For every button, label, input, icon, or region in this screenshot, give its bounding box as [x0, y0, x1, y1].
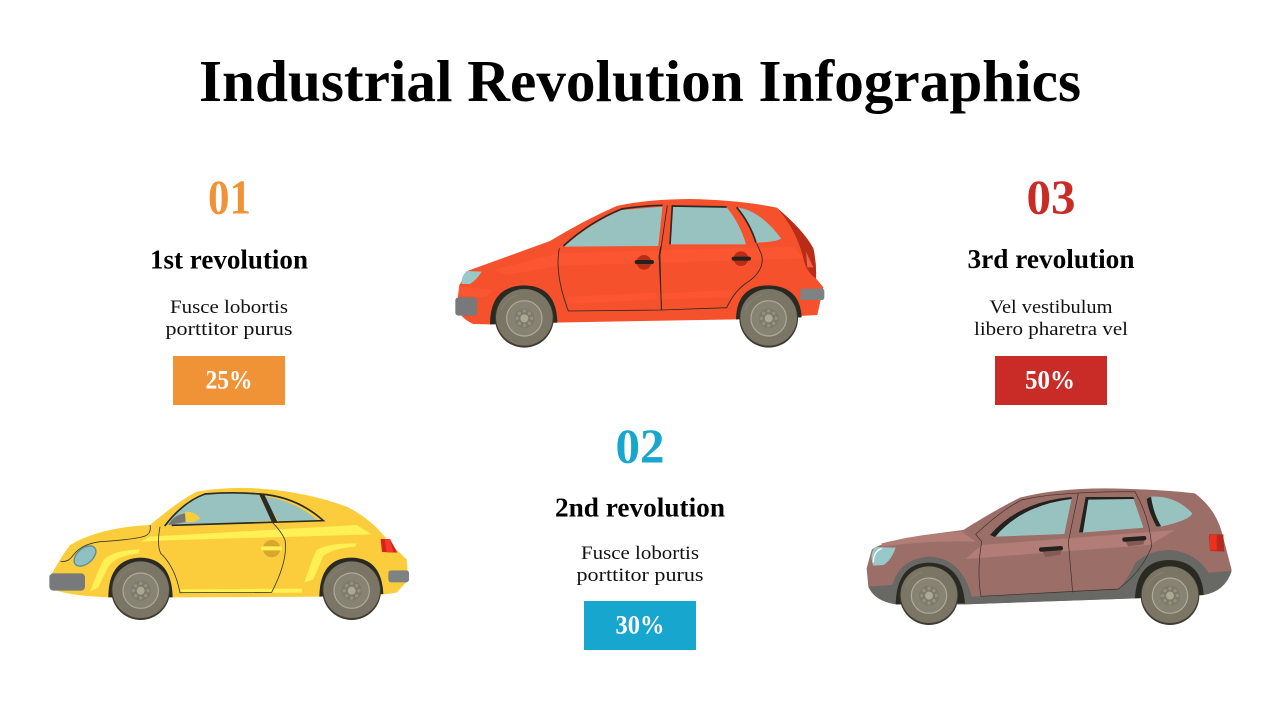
heading: 1st revolution: 1st revolution — [150, 244, 308, 274]
badge: 25%: 25% — [206, 366, 252, 394]
icon: red car — [455, 199, 824, 348]
text block: 1st revolution description — [166, 297, 292, 340]
text block: 3rd revolution description — [974, 297, 1128, 340]
number 03: 03 — [1026, 170, 1076, 224]
number 01: 01 — [208, 170, 251, 224]
text block: 3rd revolution description: libero pharetra vel — [974, 319, 1128, 340]
panel: 1st revolution — [150, 170, 308, 405]
badge: 25% — [173, 356, 285, 405]
panel: 2nd revolution — [555, 418, 725, 650]
text block: 2nd revolution description — [576, 543, 704, 586]
badge: 30%: 30% — [616, 610, 664, 640]
icon: brown car — [867, 488, 1232, 625]
number 02: 02 — [616, 418, 664, 474]
title: Industrial Revolution Infographics — [199, 48, 1081, 114]
badge: 50%: 50% — [1025, 366, 1075, 394]
text block: 3rd revolution description: Vel vestibulum — [990, 297, 1113, 318]
text block: 1st revolution description: Fusce lobortis — [170, 297, 288, 318]
text block: 2nd revolution description: Fusce lobortis — [581, 543, 699, 564]
badge: 50% — [995, 356, 1107, 405]
heading: 2nd revolution: 2nd revolution — [555, 492, 725, 522]
badge: 30% — [584, 601, 696, 650]
heading: 3rd revolution: 3rd revolution — [968, 244, 1134, 274]
panel: 3rd revolution — [968, 170, 1134, 405]
text block: 2nd revolution description: porttitor purus — [576, 565, 704, 586]
icon: yellow car — [49, 488, 409, 620]
text block: 1st revolution description: porttitor purus — [166, 319, 292, 340]
